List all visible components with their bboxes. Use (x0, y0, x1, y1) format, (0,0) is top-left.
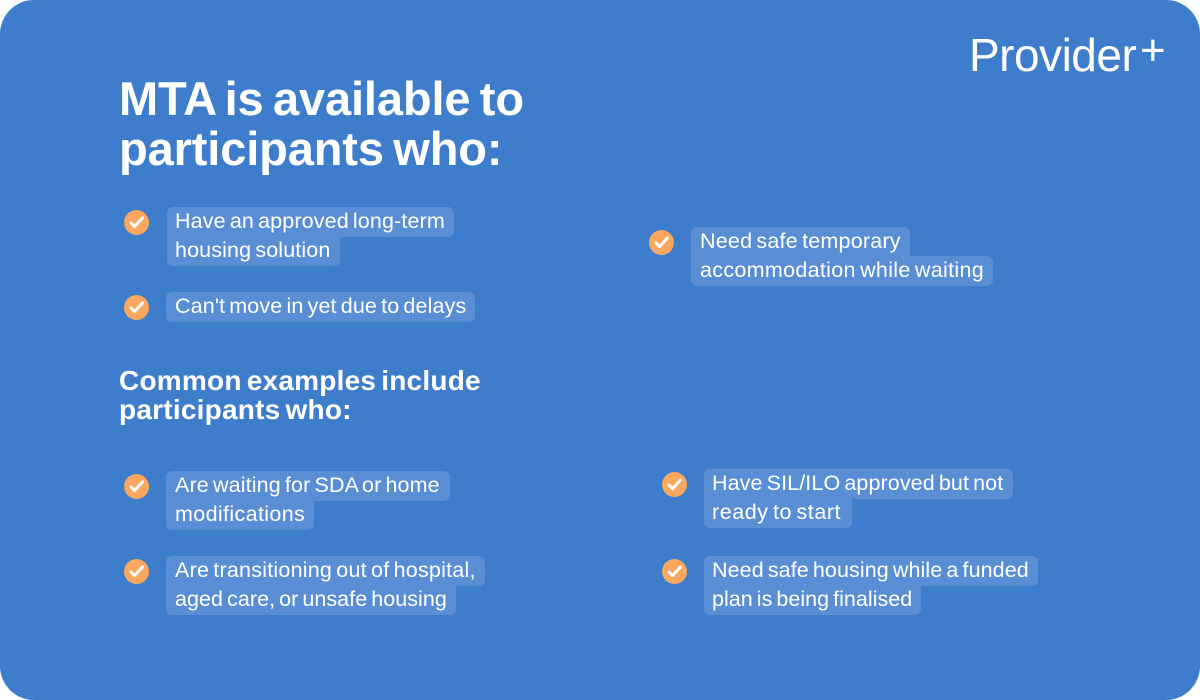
item: approved housing (124, 207, 454, 266)
text: SIL/ILO: Have SIL/ILO approved but not (712, 471, 1003, 495)
subheading: participants who: (119, 394, 352, 425)
title (119, 72, 524, 175)
icon: check (662, 472, 687, 497)
text: funded plan: Need safe housing while a funded (712, 558, 1029, 582)
text: SDA (166, 471, 450, 530)
text: SIL/ILO (704, 469, 1013, 528)
text: funded plan: plan is being finalised (712, 587, 912, 611)
item: temporary accommodation (649, 227, 993, 286)
text: temporary accommodation: Need safe temporary (700, 229, 901, 253)
logo: Provider+: + (1140, 26, 1166, 75)
item: delays (124, 292, 475, 322)
icon: check (124, 559, 149, 584)
text: hospital (166, 556, 485, 615)
text: have approved housing (167, 207, 454, 266)
text: hospital: aged care, or unsafe housing (175, 587, 447, 611)
text: temporary accommodation: accommodation while waiting (700, 258, 984, 282)
subheading (119, 365, 481, 425)
icon: check (649, 230, 674, 255)
subheading: Common examples include (119, 365, 481, 396)
text: SIL/ILO: ready to start (712, 500, 841, 524)
text: SDA: Are waiting for SDA or home (175, 473, 440, 497)
title: participants who: (119, 122, 502, 175)
title: MTA is available to (119, 72, 524, 125)
text: temporary accommodation (691, 227, 993, 286)
icon: check (124, 474, 149, 499)
text: hospital: Are transitioning out of hospital, (175, 558, 476, 582)
icon: check (124, 210, 149, 235)
icon: check (124, 295, 149, 320)
logo: Provider+: Provider (969, 29, 1136, 81)
item: SDA (124, 471, 450, 530)
text: have approved housing: housing solution (175, 238, 330, 262)
text: delays: Can't move in yet due to delays (175, 294, 466, 318)
text: SDA: modifications (175, 502, 305, 526)
item: hospital (124, 556, 485, 615)
text: have approved housing: Have an approved long-term (175, 209, 445, 233)
icon: check (662, 559, 687, 584)
item: funded plan (662, 556, 1038, 615)
text: funded plan (704, 556, 1038, 615)
item: SIL/ILO (662, 469, 1013, 528)
